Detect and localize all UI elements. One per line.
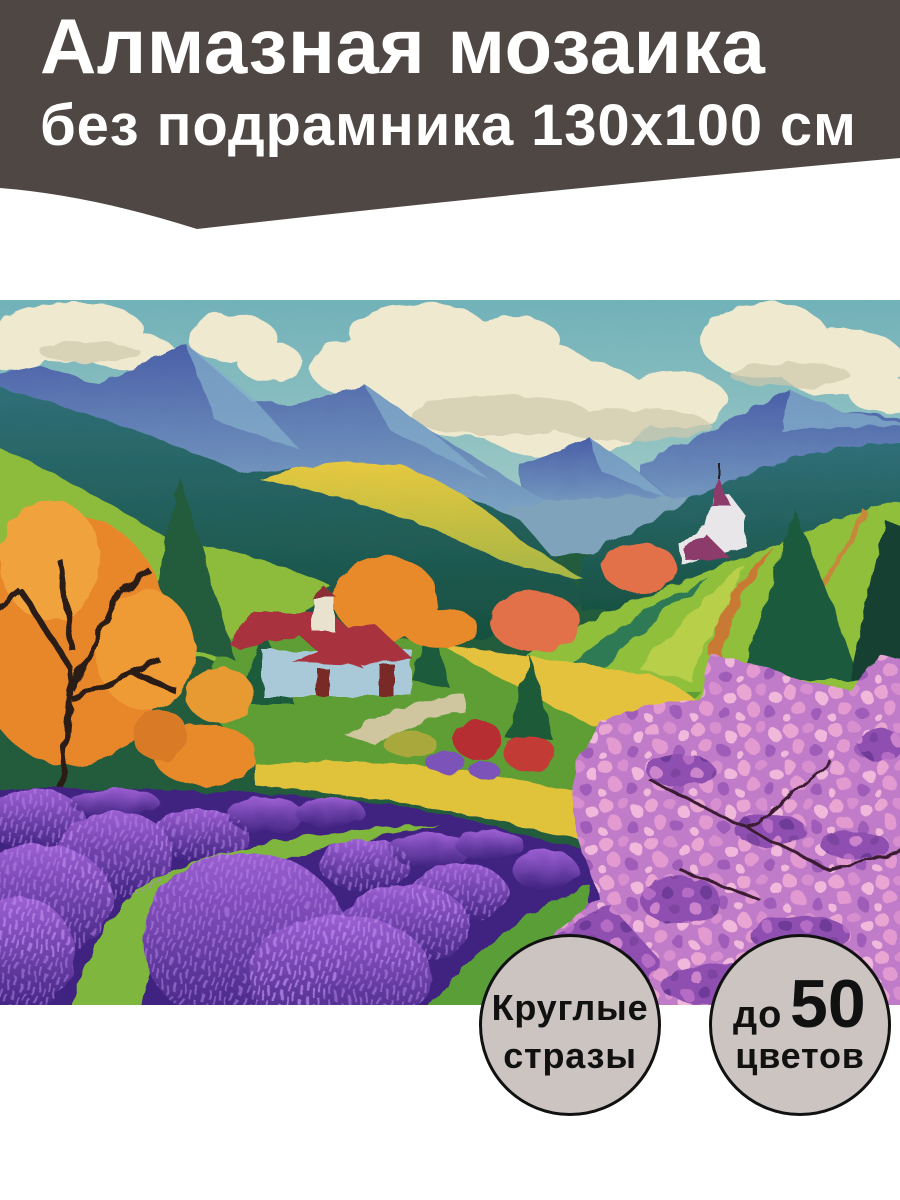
base ground xyxy=(0,540,900,1015)
orange trees behind house xyxy=(333,556,478,648)
mountains xyxy=(640,390,900,530)
house xyxy=(228,586,414,696)
small flower bushes xyxy=(384,720,556,779)
clouds xyxy=(0,302,900,458)
header banner xyxy=(0,0,900,229)
dark right trees xyxy=(740,510,860,680)
badge: up to 50 colours: 50 xyxy=(790,966,866,1042)
pink-orange trees xyxy=(490,544,678,652)
pink blossom tree xyxy=(480,655,900,1015)
title: Алмазная мозаика xyxy=(40,2,765,90)
lavender brush strokes xyxy=(0,790,508,1035)
subtitle: без подрамника 130х100 см xyxy=(40,93,857,158)
right striped fields xyxy=(520,500,900,720)
sky xyxy=(0,290,900,550)
lavender mounds front xyxy=(142,830,578,1035)
yellow field mid xyxy=(442,645,710,730)
path xyxy=(345,695,465,745)
badge: round rhinestones xyxy=(479,934,661,1116)
green grass band xyxy=(70,825,440,1015)
badge: up to 50 colours xyxy=(709,934,891,1116)
left green hill xyxy=(0,442,330,670)
large orange tree xyxy=(0,500,257,790)
badge: up to 50 colours: до xyxy=(733,994,782,1036)
lavender mounds back xyxy=(0,789,365,1013)
badge: round rhinestones: Круглые xyxy=(492,987,648,1028)
badge: up to 50 colours: цветов xyxy=(735,1035,865,1076)
painting: landscape with lavender field xyxy=(0,300,900,1005)
mid ground green xyxy=(200,631,700,800)
badge: round rhinestones: стразы xyxy=(503,1035,637,1076)
forest hills xyxy=(0,385,590,640)
lavender field base xyxy=(0,789,640,1015)
yellow hill xyxy=(260,462,585,580)
distant church xyxy=(680,463,745,565)
conifers left xyxy=(150,478,235,660)
